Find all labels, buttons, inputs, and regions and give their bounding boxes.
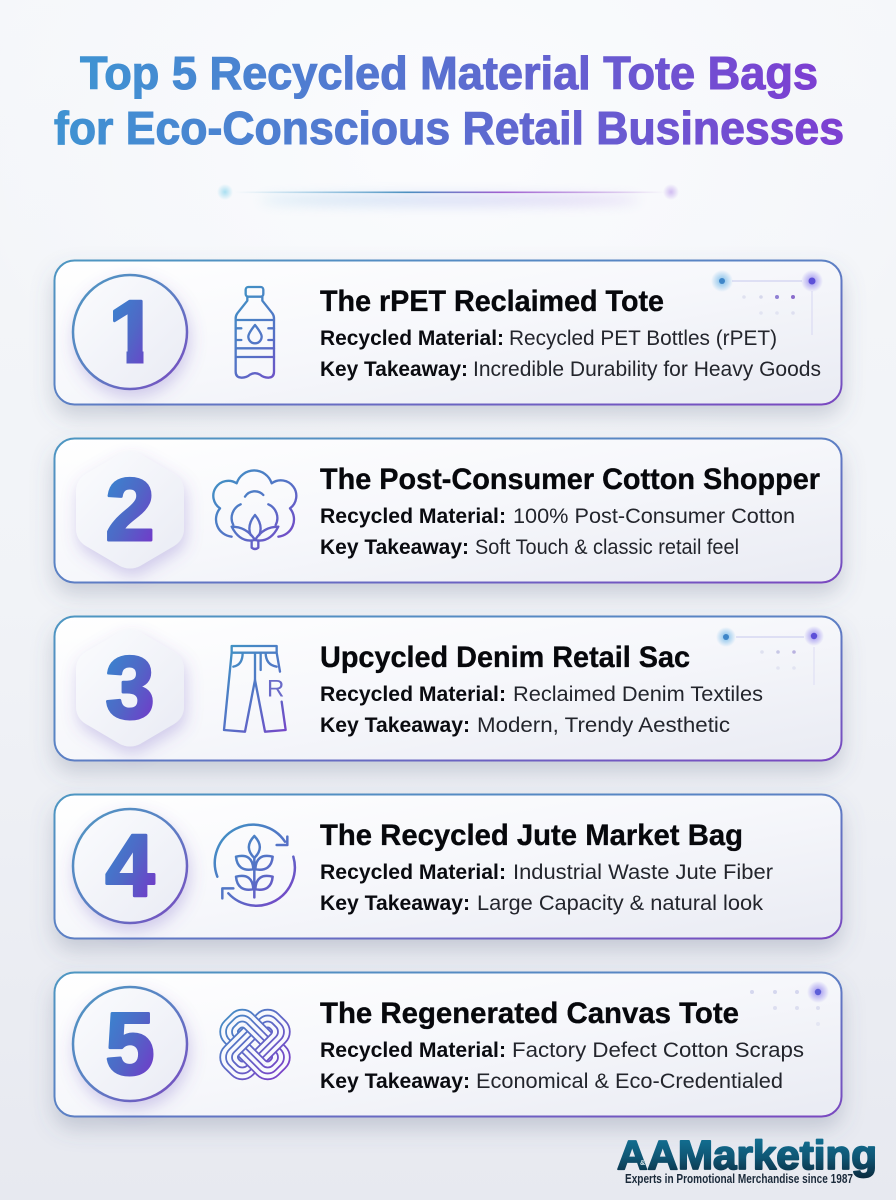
text: item 4: Industrial Waste Jute Fiber bbox=[513, 860, 773, 884]
text: item 5: Economical & Eco-Credentialed bbox=[476, 1069, 783, 1093]
text: item 5 bbox=[320, 997, 804, 1093]
logo: AAMarketing: AAMarketing bbox=[617, 1132, 877, 1178]
icon: wheat in recycling arrows bbox=[215, 825, 295, 906]
panel: item 2 bbox=[54, 438, 842, 582]
text: item 5: Factory Defect Cotton Scraps bbox=[512, 1038, 804, 1062]
title: Top 5 Recycled Material Tote Bags bbox=[80, 47, 818, 99]
number badge 2 bbox=[76, 452, 184, 568]
text: item 1: The rPET Reclaimed Tote bbox=[320, 285, 664, 318]
number badge 4 bbox=[73, 809, 187, 923]
text: item 2: Recycled Material: bbox=[320, 504, 506, 528]
text: item 1: Recycled Material: bbox=[320, 326, 504, 350]
decorative node motif bbox=[711, 270, 823, 335]
decorative node motif bbox=[716, 626, 824, 685]
number badge 1 bbox=[73, 275, 187, 389]
number badge 1: 1 bbox=[109, 282, 157, 381]
number badge 5: 5 bbox=[106, 994, 154, 1093]
panel: item 4 bbox=[54, 794, 842, 938]
icon: jeans: R bbox=[267, 676, 284, 703]
title bbox=[54, 47, 844, 154]
number badge 3: 3 bbox=[106, 638, 154, 737]
text: item 3: Recycled Material: bbox=[320, 682, 506, 706]
icon: jeans bbox=[224, 646, 286, 732]
title divider bbox=[217, 184, 679, 206]
panel: item 5 bbox=[54, 972, 842, 1116]
text: item 4: Large Capacity & natural look bbox=[477, 891, 763, 915]
text: item 3: Upcycled Denim Retail Sac bbox=[320, 641, 690, 674]
text: item 1: Incredible Durability for Heavy Goods bbox=[473, 357, 821, 381]
number badge 3 bbox=[76, 630, 184, 746]
icon: woven knot bbox=[219, 1008, 291, 1080]
text: item 4 bbox=[320, 819, 773, 915]
number badge 2: 2 bbox=[106, 460, 154, 559]
text: item 4: Key Takeaway: bbox=[320, 891, 470, 915]
icon: plastic bottle bbox=[236, 287, 274, 378]
text: item 3 bbox=[320, 641, 763, 737]
text: item 5: The Regenerated Canvas Tote bbox=[320, 997, 739, 1030]
text: item 3: Reclaimed Denim Textiles bbox=[513, 682, 763, 706]
text: item 3: Modern, Trendy Aesthetic bbox=[477, 713, 730, 737]
text: item 1: Recycled PET Bottles (rPET) bbox=[509, 326, 777, 350]
text: item 3: Key Takeaway: bbox=[320, 713, 470, 737]
decorative node motif bbox=[750, 981, 829, 1026]
title: for Eco-Conscious Retail Businesses bbox=[54, 102, 844, 154]
text: item 2: 100% Post-Consumer Cotton bbox=[513, 504, 795, 528]
icon: cotton boll bbox=[213, 470, 296, 549]
text: item 5: Key Takeaway: bbox=[320, 1069, 470, 1093]
logo: AAMarketing: & bbox=[640, 1160, 645, 1167]
text: item 1: Key Takeaway: bbox=[320, 357, 468, 381]
panel: item 3 bbox=[54, 616, 842, 760]
text: item 4: Recycled Material: bbox=[320, 860, 506, 884]
text: item 5: Recycled Material: bbox=[320, 1038, 506, 1062]
panel: item 1 bbox=[54, 260, 842, 404]
text: item 2: Key Takeaway: bbox=[320, 535, 469, 559]
text: item 2: The Post-Consumer Cotton Shopper bbox=[320, 463, 820, 496]
text: item 2: Soft Touch & classic retail feel bbox=[475, 535, 739, 559]
number badge 4: 4 bbox=[106, 816, 155, 915]
text: item 4: The Recycled Jute Market Bag bbox=[320, 819, 743, 852]
text: item 2 bbox=[320, 463, 820, 559]
text: item 1 bbox=[320, 285, 821, 381]
number badge 5 bbox=[73, 987, 187, 1101]
